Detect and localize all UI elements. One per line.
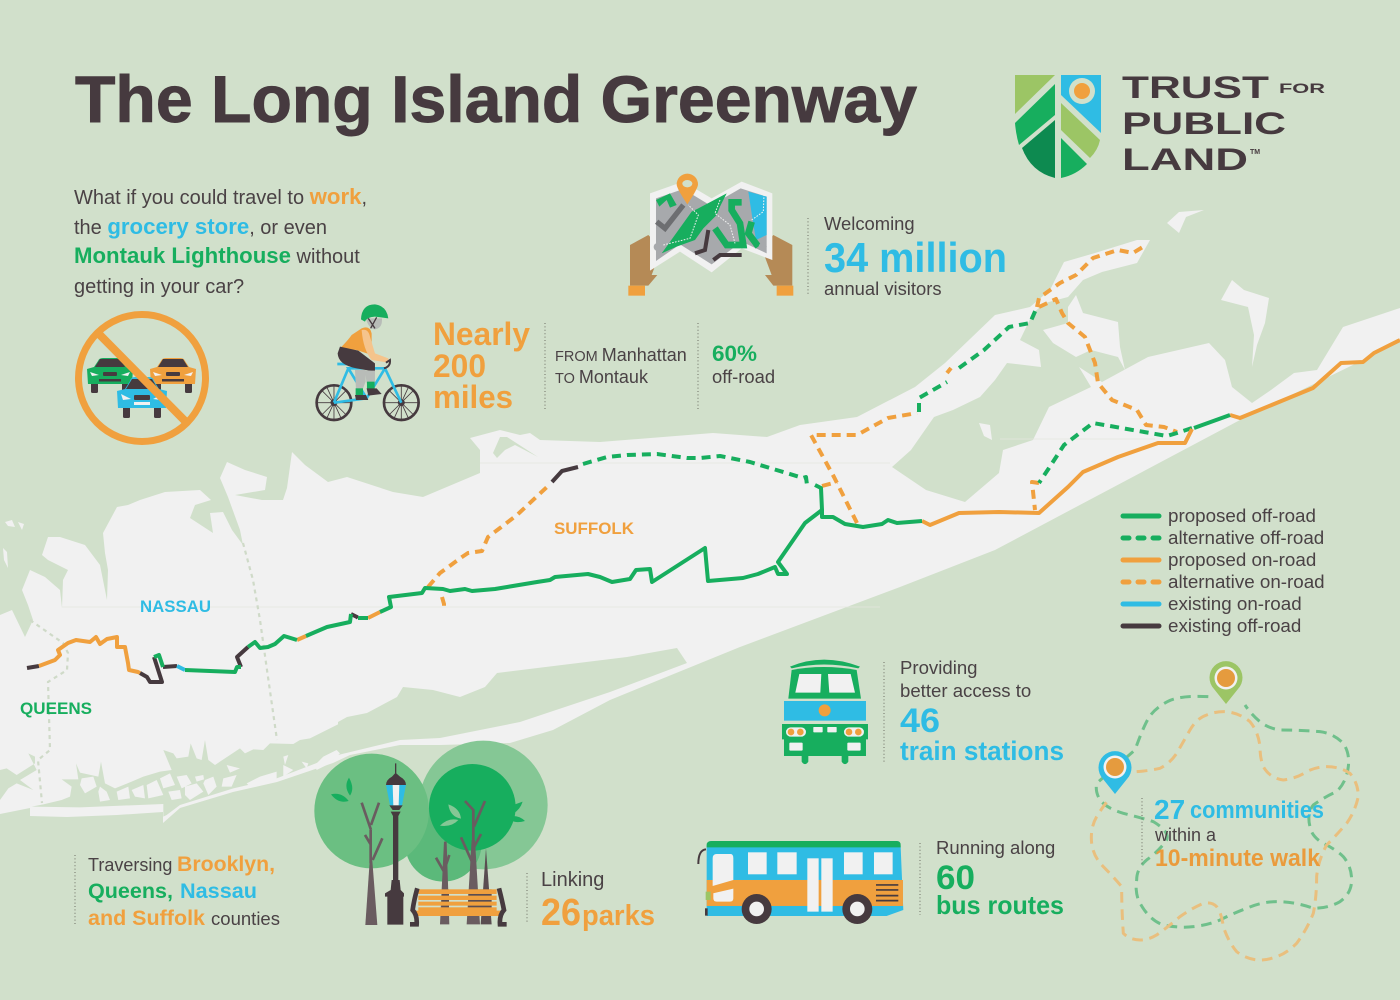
map: Great South Bay east	[338, 648, 687, 755]
intro paragraph	[74, 184, 367, 298]
icon: green location pin	[1210, 661, 1243, 704]
logo wordmark: LAND	[1122, 141, 1248, 177]
rider head and helmet	[361, 304, 388, 329]
map: county boundary lines	[30, 543, 277, 803]
stat: 27 communities within a 10-minute walk	[1154, 794, 1324, 872]
legend	[1123, 505, 1325, 636]
rider arm	[362, 330, 388, 363]
thumbs	[654, 243, 767, 251]
text: counties traversed	[88, 853, 280, 930]
map: small north shore harbour	[493, 437, 538, 458]
map terrain	[656, 188, 767, 264]
stat: 46 train stations: train stations	[900, 736, 1064, 766]
street lamp	[385, 763, 406, 925]
route: proposed off-road main line	[154, 415, 1230, 672]
route: proposed on-road segments	[39, 340, 1400, 673]
stat: 46 train stations: better access to	[900, 680, 1031, 701]
stat: 60 bus routes: bus routes	[936, 890, 1064, 920]
branches	[362, 801, 485, 873]
stat: 34 million annual visitors: 34 million	[824, 234, 1007, 281]
map: Gardiners Island	[1221, 280, 1269, 367]
map water	[748, 192, 767, 240]
text: counties traversed: Nassau	[180, 880, 257, 903]
illustration: park with trees, lamp and bench	[314, 741, 548, 925]
text: counties traversed: counties	[211, 908, 280, 929]
stat: nearly 200 miles	[433, 316, 530, 415]
route: existing off-road segments	[27, 467, 578, 682]
stat: linking 26 parks: Linking	[541, 869, 604, 891]
route: alternative on-road north branches	[428, 245, 1177, 611]
route: alternative off-road branches	[583, 307, 1192, 485]
leaves	[331, 778, 525, 826]
map trail	[663, 195, 764, 245]
logo trademark: TM	[1250, 149, 1260, 156]
rider shorts	[338, 347, 375, 372]
map: Long Island land mass	[0, 210, 1400, 823]
stat: 46 train stations: Providing	[900, 657, 978, 678]
handlebar	[384, 360, 390, 368]
stat: 27 communities within a 10-minute walk: within a	[1154, 825, 1217, 845]
logo wordmark: TRUST	[1122, 69, 1269, 105]
stat: nearly 200 miles: miles	[433, 379, 513, 415]
stat: 27 communities within a 10-minute walk: communities	[1190, 797, 1324, 824]
stat: nearly 200 miles: Nearly	[433, 316, 530, 352]
icon: no cars sign	[78, 314, 206, 442]
stat: 46 train stations	[900, 657, 1064, 766]
stat: 60 percent off-road: off-road	[712, 366, 775, 387]
map parks	[656, 193, 727, 253]
icon: train	[782, 660, 868, 764]
title: The Long Island Greenway	[75, 63, 918, 136]
map: Robins Island	[979, 423, 992, 440]
orange dashed trail	[1091, 712, 1358, 960]
icon: blue location pin	[1098, 751, 1132, 794]
logo wordmark: PUBLIC	[1122, 105, 1286, 141]
map: Plum Island	[1167, 210, 1204, 233]
stat: nearly 200 miles: 200	[433, 348, 486, 384]
intro paragraph: the grocery store, or even	[74, 214, 327, 239]
map: greenway routes	[27, 245, 1400, 682]
logo shield	[1015, 75, 1101, 178]
map: faint county grid lines	[62, 439, 1155, 607]
tree canopies	[314, 741, 548, 882]
stat: 60 percent off-road	[712, 341, 775, 387]
stat: 34 million annual visitors: annual visitors	[824, 278, 942, 299]
divider	[526, 873, 528, 923]
map roads	[657, 205, 683, 228]
prohibition ring and slash	[78, 314, 206, 442]
text: from Manhattan to Montauk: TO Montauk	[555, 367, 649, 387]
green dashed trail	[1096, 696, 1352, 927]
map: Shelter Island	[1043, 295, 1125, 370]
divider	[919, 843, 921, 915]
icon: hands holding map	[628, 174, 793, 296]
stat: linking 26 parks: 26	[541, 892, 581, 934]
tree trunks	[365, 840, 480, 925]
route: existing on-road segment	[177, 666, 185, 670]
legend: alternative off-road: alternative off-road	[1168, 527, 1324, 548]
text: counties traversed: and Suffolk	[88, 907, 205, 930]
stat: 60 bus routes: Running along	[936, 837, 1055, 858]
map sheet	[650, 182, 772, 272]
rider front leg	[365, 371, 382, 396]
stat: 27 communities within a 10-minute walk: 10-minute walk	[1155, 845, 1321, 872]
stat: 34 million annual visitors	[824, 213, 1007, 299]
stat: 60 bus routes	[936, 837, 1064, 920]
divider	[1141, 798, 1143, 866]
hands	[630, 235, 792, 286]
divider	[74, 855, 76, 925]
divider	[807, 218, 809, 295]
stat: 27 communities within a 10-minute walk: 27	[1154, 794, 1185, 825]
text: counties traversed: Queens,	[88, 880, 173, 903]
text: counties traversed: Brooklyn,	[177, 853, 275, 876]
divider	[544, 323, 546, 410]
legend: alternative on-road: alternative on-road	[1168, 571, 1325, 592]
stat: 60 bus routes: 60	[936, 859, 975, 897]
county label: Nassau: NASSAU	[140, 597, 211, 616]
bicycle wheels	[317, 385, 419, 420]
map pin	[677, 174, 698, 204]
stat: 46 train stations: 46	[900, 702, 940, 740]
map: south shore marsh	[0, 723, 340, 817]
stat: linking 26 parks	[541, 869, 655, 934]
intro paragraph: What if you could travel to work,	[74, 184, 367, 209]
intro paragraph: Montauk Lighthouse without	[74, 243, 360, 268]
legend: existing on-road: existing on-road	[1168, 593, 1302, 614]
stat: linking 26 parks: parks	[582, 900, 655, 932]
logo wordmark: FOR	[1279, 80, 1325, 96]
legend: proposed off-road: proposed off-road	[1168, 505, 1316, 526]
rider back leg	[355, 370, 368, 400]
illustration: 10-minute walk trails	[1091, 661, 1358, 960]
cuffs	[628, 286, 793, 296]
legend: existing off-road: existing off-road	[1168, 615, 1301, 636]
stat: 34 million annual visitors: Welcoming	[824, 213, 915, 234]
stat: 60 percent off-road: 60%	[712, 341, 757, 366]
icon: blue car	[117, 377, 167, 418]
rider torso	[340, 327, 372, 355]
icon: green car	[87, 358, 133, 393]
county label: Queens: QUEENS	[20, 699, 92, 718]
logo: Trust for Public Land	[1015, 69, 1325, 178]
divider	[883, 662, 885, 762]
back trunk	[481, 848, 492, 924]
map: west bay islets	[3, 520, 24, 568]
logo wordmark	[1122, 69, 1325, 177]
text: from Manhattan to Montauk	[555, 345, 687, 387]
text: from Manhattan to Montauk: FROM Manhattan	[555, 345, 687, 365]
icon: cyclist	[317, 304, 419, 420]
text: counties traversed: Traversing	[88, 855, 172, 875]
legend: proposed on-road: proposed on-road	[1168, 549, 1316, 570]
intro paragraph: getting in your car?	[74, 276, 244, 298]
divider	[697, 323, 699, 410]
bench	[410, 888, 507, 924]
bicycle frame	[334, 364, 401, 403]
icon: orange car	[150, 358, 196, 393]
county label: Suffolk: SUFFOLK	[554, 519, 635, 538]
icon: bus	[698, 841, 903, 924]
